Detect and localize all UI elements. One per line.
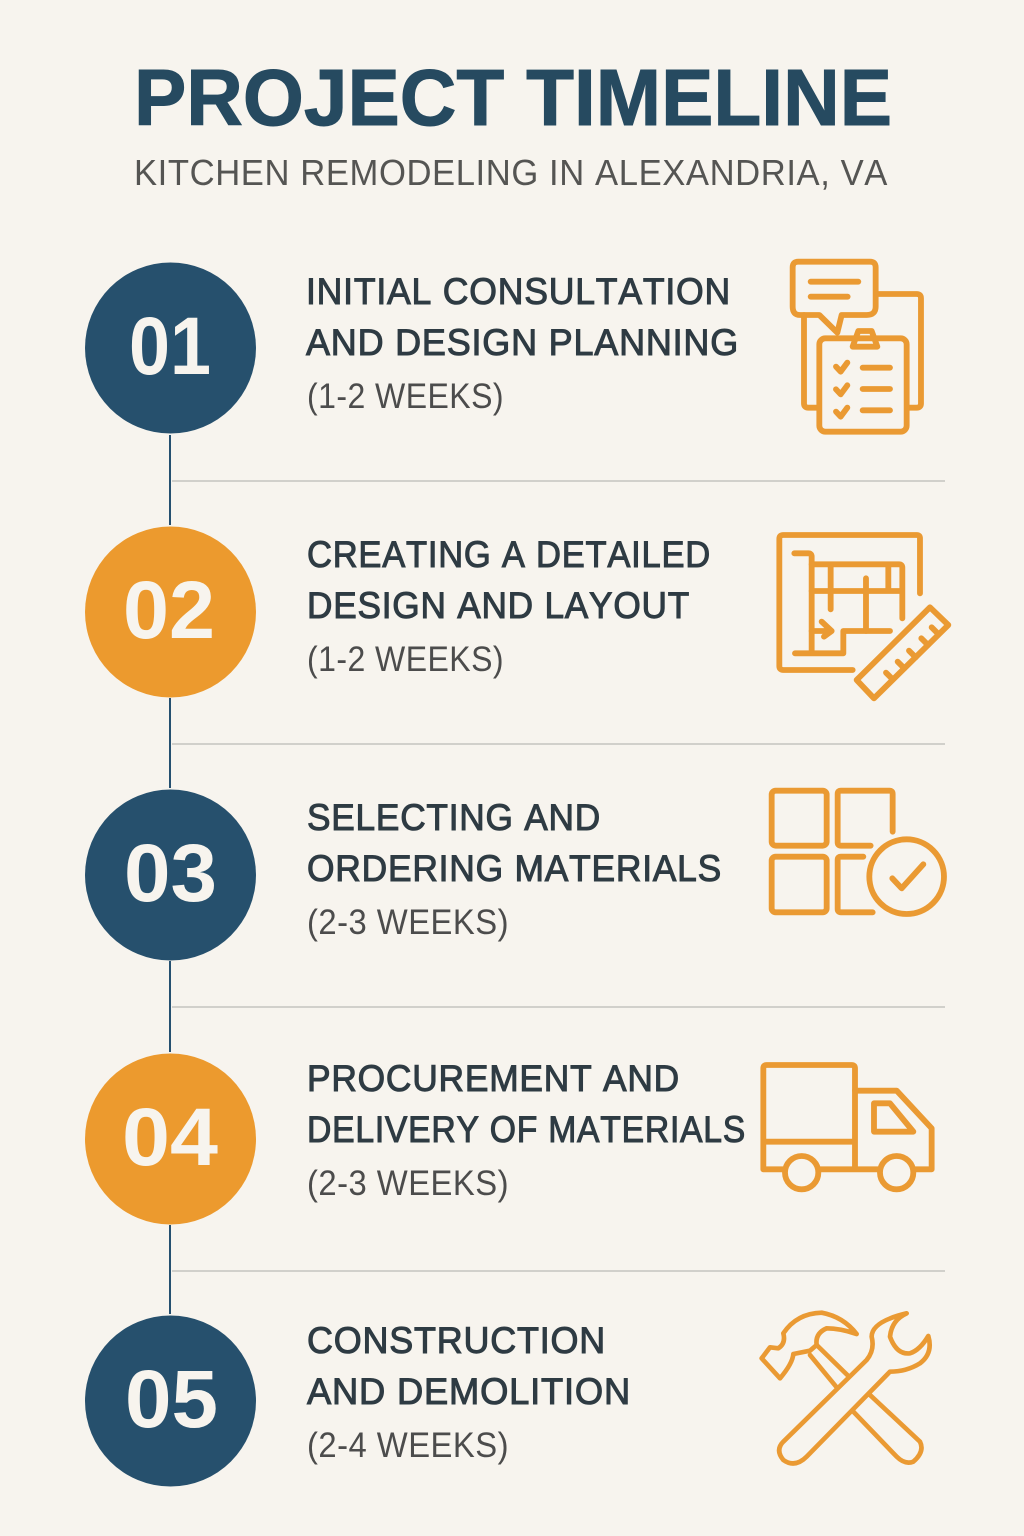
- step 5 text: AND DEMOLITION: [307, 1371, 631, 1412]
- panel: step 5: [85, 1313, 930, 1486]
- step 4 number badge: 04: [122, 1092, 218, 1183]
- panel: step 4: [85, 1054, 932, 1224]
- step 1 number badge: [85, 262, 256, 434]
- step 1 text: INITIAL CONSULTATION: [306, 271, 731, 312]
- icon: chat bubble and clipboard checklist: [793, 262, 921, 432]
- icon: delivery truck: [763, 1065, 932, 1189]
- step 2 number badge: [85, 526, 256, 698]
- panel: step 1: [85, 262, 921, 434]
- title: PROJECT TIMELINE: [134, 53, 892, 142]
- step 1 text: AND DESIGN PLANNING: [306, 322, 739, 363]
- step 2 text: CREATING A DETAILED: [307, 534, 711, 575]
- step 5 text: [307, 1320, 631, 1465]
- icon: crossed hammer and wrench: [762, 1313, 930, 1463]
- step 3 text: SELECTING AND: [307, 797, 601, 838]
- step 3 number badge: [85, 790, 256, 960]
- step 5 text: CONSTRUCTION: [307, 1320, 606, 1361]
- step 5 text: (2-4 WEEKS): [307, 1426, 509, 1465]
- step 5 number badge: [85, 1316, 256, 1486]
- step 1 text: [306, 271, 739, 416]
- step 2 text: [307, 534, 711, 679]
- step 4 text: DELIVERY OF MATERIALS: [307, 1109, 746, 1150]
- panel: step 3: [85, 790, 944, 960]
- icon: material tiles with check mark: [772, 791, 944, 914]
- step 3 text: ORDERING MATERIALS: [307, 848, 722, 889]
- step 3 text: (2-3 WEEKS): [307, 903, 509, 942]
- step 4 text: PROCUREMENT AND: [307, 1058, 680, 1099]
- step 2 number badge: 02: [123, 565, 215, 656]
- step 2 text: DESIGN AND LAYOUT: [307, 585, 690, 626]
- step 1 number badge: 01: [129, 301, 211, 392]
- panel: step 2: [85, 526, 948, 698]
- subtitle: KITCHEN REMODELING IN ALEXANDRIA, VA: [134, 152, 888, 193]
- step 4 text: [307, 1058, 746, 1203]
- step 4 text: (2-3 WEEKS): [307, 1164, 509, 1203]
- step 2 text: (1-2 WEEKS): [307, 640, 504, 679]
- step 3 number badge: 03: [124, 828, 217, 919]
- step 4 number badge: [85, 1054, 256, 1224]
- icon: floor plan and ruler: [779, 535, 948, 698]
- step 1 text: (1-2 WEEKS): [307, 377, 504, 416]
- step 3 text: [307, 797, 722, 942]
- step 5 number badge: 05: [125, 1354, 218, 1445]
